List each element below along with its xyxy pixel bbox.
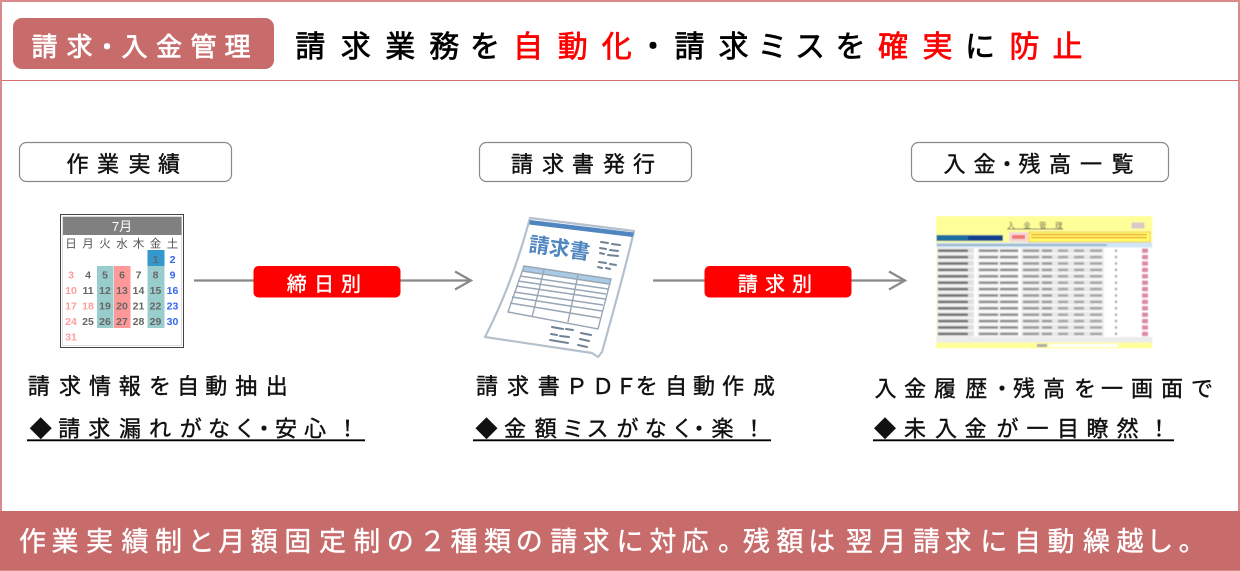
calendar icon: 16: [167, 285, 178, 297]
benefit: unpaid at a glance: ◆未入金が一目瞭然！: [874, 416, 1170, 442]
title: [295, 31, 1082, 64]
calendar icon: 30: [167, 316, 178, 328]
footer band: [0, 511, 1240, 570]
calendar icon: 29: [150, 316, 161, 328]
calendar icon: 13: [116, 285, 128, 297]
calendar icon: 6: [119, 270, 125, 282]
benefit: no missed invoices: ◆請求漏れがなく・安心！: [30, 416, 359, 442]
arrow: invoice to list: [653, 272, 905, 290]
icon: invoice document: [485, 218, 634, 357]
calendar icon: 日: [65, 238, 77, 250]
calendar icon: 5: [102, 270, 108, 282]
calendar icon: 7月: [112, 219, 132, 234]
header badge: [13, 18, 274, 69]
button: by closing date: [254, 266, 400, 298]
arrow: calendar to invoice: [194, 272, 471, 290]
calendar icon: [60, 214, 184, 348]
calendar icon: 23: [167, 300, 178, 312]
calendar icon: 2: [170, 254, 176, 266]
calendar icon: 9: [170, 270, 176, 282]
calendar icon: 22: [150, 300, 161, 312]
calendar icon: 20: [116, 300, 128, 312]
calendar icon: 10: [65, 285, 77, 297]
icon: invoice document: 請求書: [527, 233, 591, 265]
calendar icon: 7: [136, 270, 142, 282]
calendar icon: 31: [65, 332, 77, 344]
title: に: [965, 31, 995, 64]
calendar icon: 27: [116, 316, 128, 328]
calendar icon: 17: [65, 300, 77, 312]
title: 請求業務を: [295, 31, 500, 64]
calendar icon: 4: [85, 270, 91, 282]
caption: invoice PDF: 請求書ＰＤＦを自動作成: [476, 374, 775, 399]
caption: payment history: 入金履歴・残高を一画面で: [874, 376, 1213, 402]
calendar icon: 1: [153, 254, 159, 266]
calendar icon: 28: [133, 316, 144, 328]
label: work records: [20, 142, 232, 182]
calendar icon: 火: [99, 238, 111, 250]
calendar icon: 8: [153, 270, 159, 282]
button: by closing date: 締日別: [287, 273, 361, 296]
footer band: 作業実績制と月額固定制の２種類の請求に対応。残額は翌月請求に自動繰越し。: [19, 527, 1206, 557]
calendar icon: 金: [150, 238, 162, 250]
calendar icon: 18: [82, 300, 94, 312]
calendar icon: 19: [99, 300, 111, 312]
screenshot: payment management list: [936, 216, 1152, 348]
calendar icon: 25: [82, 316, 94, 328]
calendar icon: 24: [65, 316, 77, 328]
title: 自動化: [513, 31, 632, 64]
header badge: 請求・入金管理: [32, 32, 251, 62]
calendar icon: 水: [116, 238, 128, 250]
benefit: no amount errors: ◆金額ミスがなく・楽！: [476, 416, 765, 442]
screenshot: payment management list: 入金管理: [1008, 220, 1063, 230]
label: invoice issue: 請求書発行: [511, 152, 655, 177]
calendar icon: 月: [82, 238, 94, 250]
caption: auto extract: 請求情報を自動抽出: [28, 374, 288, 399]
calendar icon: 12: [99, 285, 111, 297]
calendar icon: 15: [150, 285, 161, 297]
calendar icon: 26: [99, 316, 111, 328]
title: ・請求ミスを: [638, 31, 866, 64]
label: payment balance list: [912, 142, 1168, 182]
button: by invoice: 請求別: [738, 273, 812, 296]
label: invoice issue: [480, 142, 692, 182]
calendar icon: 木: [133, 238, 145, 250]
calendar icon: 土: [167, 238, 178, 250]
calendar icon: 14: [133, 285, 144, 297]
label: payment balance list: 入金・残高一覧: [944, 152, 1134, 177]
calendar icon: 21: [133, 300, 144, 312]
calendar icon: 11: [82, 285, 94, 297]
label: work records: 作業実績: [66, 152, 180, 177]
title: 防止: [1010, 31, 1082, 64]
button: by invoice: [704, 266, 852, 298]
title: 確実: [878, 31, 952, 64]
calendar icon: 3: [68, 270, 74, 282]
